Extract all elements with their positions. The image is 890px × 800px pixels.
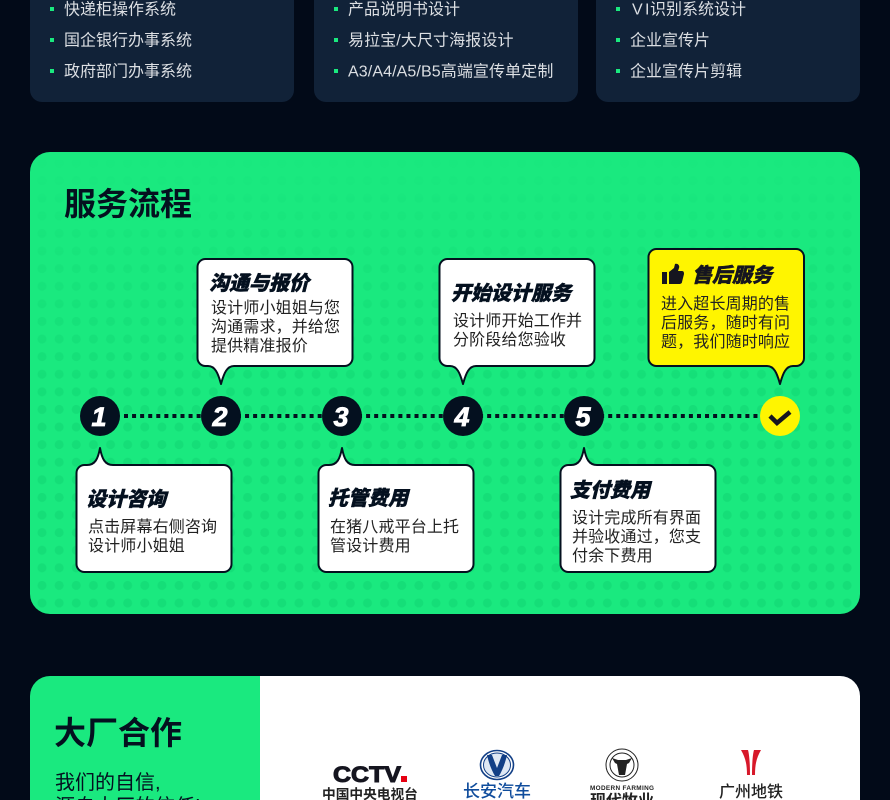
callout: step 2 communication and quote: 提供精准报价: [211, 337, 308, 355]
callout: step 2 communication and quote: [198, 259, 352, 384]
list: print items: 产品说明书设计: [348, 0, 460, 18]
logo: CCTV: [322, 762, 418, 800]
callout: step 3 escrow fee: 管设计费用: [330, 537, 411, 555]
list: brand items: 企业宣传片剪辑: [630, 62, 742, 80]
panel: service process: [30, 152, 860, 614]
list: print items: [334, 0, 553, 80]
panel: partners intro: [30, 676, 260, 800]
logo: Modern Farming: MODERN FARMING: [590, 785, 654, 792]
step 5 marker: [564, 396, 604, 436]
icon: thumbs up: [662, 264, 684, 284]
list: brand items: 企业宣传片: [630, 32, 710, 50]
step 2 marker: 2: [211, 402, 228, 432]
callout: step 1 design consultation: 设计师小姐姐: [88, 537, 185, 555]
heading: big-company partners: 大厂合作: [54, 715, 182, 751]
callout: step 1 design consultation: [76, 448, 232, 572]
callout: step 2 communication and quote: 沟通与报价: [209, 272, 312, 295]
callout: step 5 payment: 设计完成所有界面: [572, 509, 701, 527]
step 4 marker: 4: [453, 402, 470, 432]
logo: Guangzhou Metro: [719, 750, 783, 800]
callout: step 1 design consultation: 点击屏幕右侧咨询: [88, 518, 217, 536]
callout: step 4 start design service: 分阶段给您验收: [453, 331, 566, 349]
panel: software services card: [30, 0, 294, 102]
callout: step 3 escrow fee: 托管费用: [328, 487, 411, 510]
step 1 marker: 1: [91, 402, 107, 432]
step 1 marker: [80, 396, 120, 436]
callout: step 2 communication and quote: 设计师小姐姐与您: [211, 299, 340, 317]
step 3 marker: 3: [333, 402, 349, 432]
list: print items: 易拉宝/大尺寸海报设计: [348, 32, 514, 50]
callout: step 4 start design service: 设计师开始工作并: [453, 312, 582, 330]
step 4 marker: [443, 396, 483, 436]
list: brand items: 识别系统设计: [650, 0, 746, 18]
callout: step 1 design consultation: 设计咨询: [86, 488, 169, 511]
callout: after-sales service: [648, 249, 804, 384]
heading: service process: 服务流程: [64, 186, 192, 222]
panel: print design card: [314, 0, 578, 102]
list: print items: A3/A4/A5/B5高端宣传单定制: [348, 62, 553, 80]
list: brand items: I: [645, 2, 649, 18]
partners tagline: 我们的自信,: [55, 771, 161, 794]
final step check marker: [760, 396, 800, 436]
list: software items: 快递柜操作系统: [64, 0, 176, 18]
callout: step 4 start design service: 开始设计服务: [451, 282, 574, 305]
timeline dotted line: [124, 414, 768, 418]
list: brand items: V: [632, 2, 643, 18]
list: software items: [50, 0, 192, 80]
callout: after-sales service: 后服务，随时有问: [661, 314, 790, 332]
panel: partner logos: [260, 676, 860, 800]
list: brand items: [616, 0, 746, 80]
callout: step 2 communication and quote: 沟通需求，并给您: [211, 318, 340, 336]
callout: after-sales service: 售后服务: [692, 264, 775, 287]
callout: step 5 payment: 并验收通过，您支: [572, 528, 701, 546]
callout: step 4 start design service: [440, 259, 594, 384]
step 5 marker: 5: [575, 402, 591, 432]
panel: brand and video card: [596, 0, 860, 102]
callout: step 5 payment: 支付费用: [570, 479, 653, 502]
step 3 marker: [322, 396, 362, 436]
logo: Changan Auto: [463, 750, 531, 800]
callout: step 3 escrow fee: 在猪八戒平台上托: [330, 518, 459, 536]
callout: step 5 payment: 付余下费用: [572, 546, 653, 565]
callout: after-sales service: 进入超长周期的售: [661, 295, 790, 313]
callout: step 5 payment: [560, 448, 716, 572]
list: software items: 政府部门办事系统: [64, 62, 192, 80]
callout: step 3 escrow fee: [318, 448, 474, 572]
logo: CCTV: CCTV: [333, 762, 401, 787]
callout: after-sales service: 题，我们随时响应: [661, 332, 790, 351]
list: software items: 国企银行办事系统: [64, 32, 192, 50]
step 2 marker: [201, 396, 241, 436]
logo: Modern Farming: [590, 749, 654, 800]
